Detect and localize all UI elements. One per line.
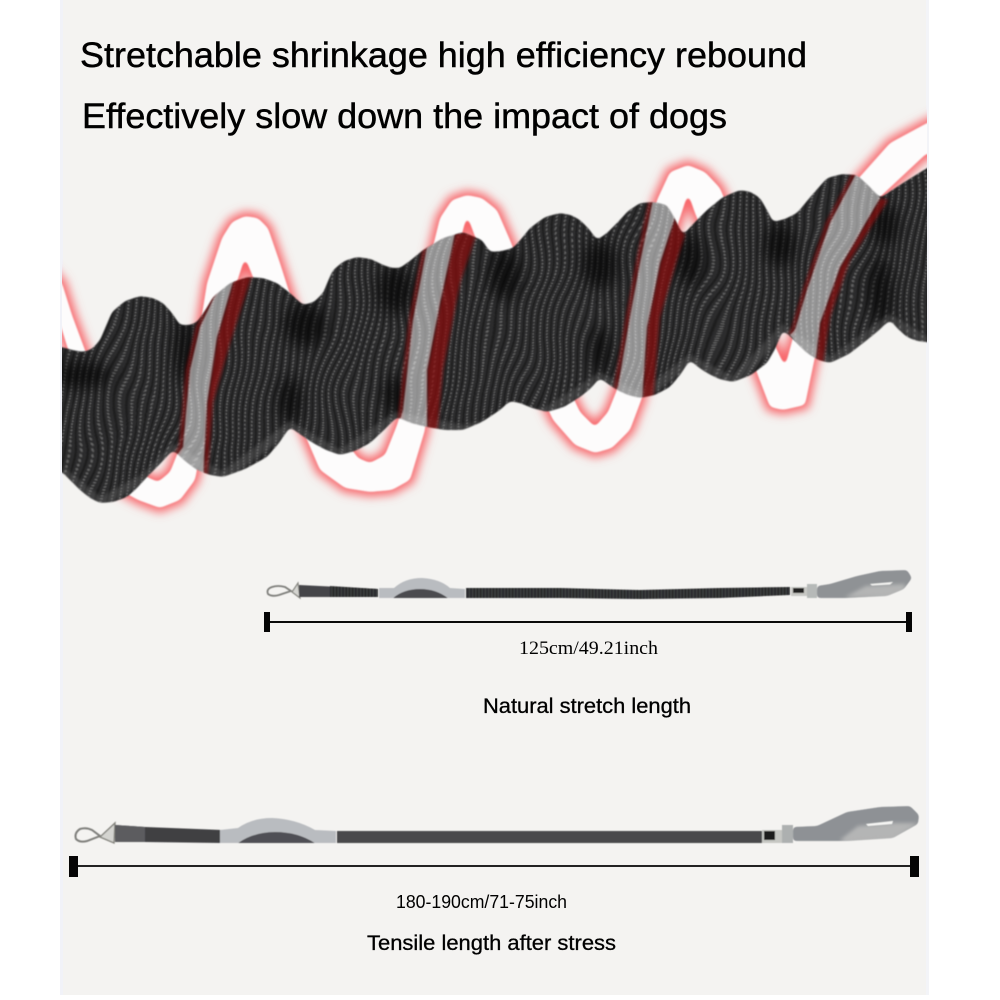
- length label: 125cm: 125cm/49.21inch: [519, 638, 659, 659]
- stretched band: [337, 831, 762, 843]
- translucent wave over rope: limb 1: [172, 275, 252, 480]
- bottom rim highlight: [62, 320, 927, 503]
- strap: [299, 585, 378, 597]
- translucent wave over rope: limb 3: [615, 200, 685, 402]
- length label: 180-190cm: 180-190cm/71-75inch: [396, 892, 567, 912]
- caption: natural stretch length: Natural stretch length: [483, 695, 691, 718]
- strap: [115, 825, 222, 843]
- caption: tensile length: Tensile length after stress: [367, 932, 616, 955]
- loop opening: [870, 582, 893, 586]
- buckle: [762, 825, 793, 843]
- short leash: natural length: [268, 570, 912, 599]
- translucent wave over rope: limb 2: [400, 232, 477, 435]
- red glowing wave behind rope: [50, 115, 945, 508]
- translucent wave over rope: limb 4: [790, 172, 888, 365]
- padded handle: [379, 578, 465, 598]
- title: [80, 36, 807, 136]
- measurement bar: 180-190cm: [69, 856, 919, 877]
- buckle: [791, 584, 817, 598]
- title line 2: Effectively slow down the impact of dogs: [82, 97, 727, 136]
- measurement bar: 125cm: [264, 612, 912, 632]
- long leash: stretched length: [76, 806, 919, 843]
- swivel clasp: [268, 583, 300, 598]
- loop handle: [793, 806, 919, 841]
- close-up of elastic rope with rebound wave: [62, 110, 927, 518]
- swivel clasp: [76, 823, 115, 843]
- loop opening: [866, 821, 893, 826]
- knitted elastic rope: [62, 166, 927, 504]
- padded handle: [220, 818, 336, 843]
- loop handle: [817, 570, 912, 598]
- rope shading folds: [50, 203, 927, 503]
- title line 1: Stretchable shrinkage high efficiency rebound: [80, 36, 807, 75]
- bungee section: [466, 587, 790, 599]
